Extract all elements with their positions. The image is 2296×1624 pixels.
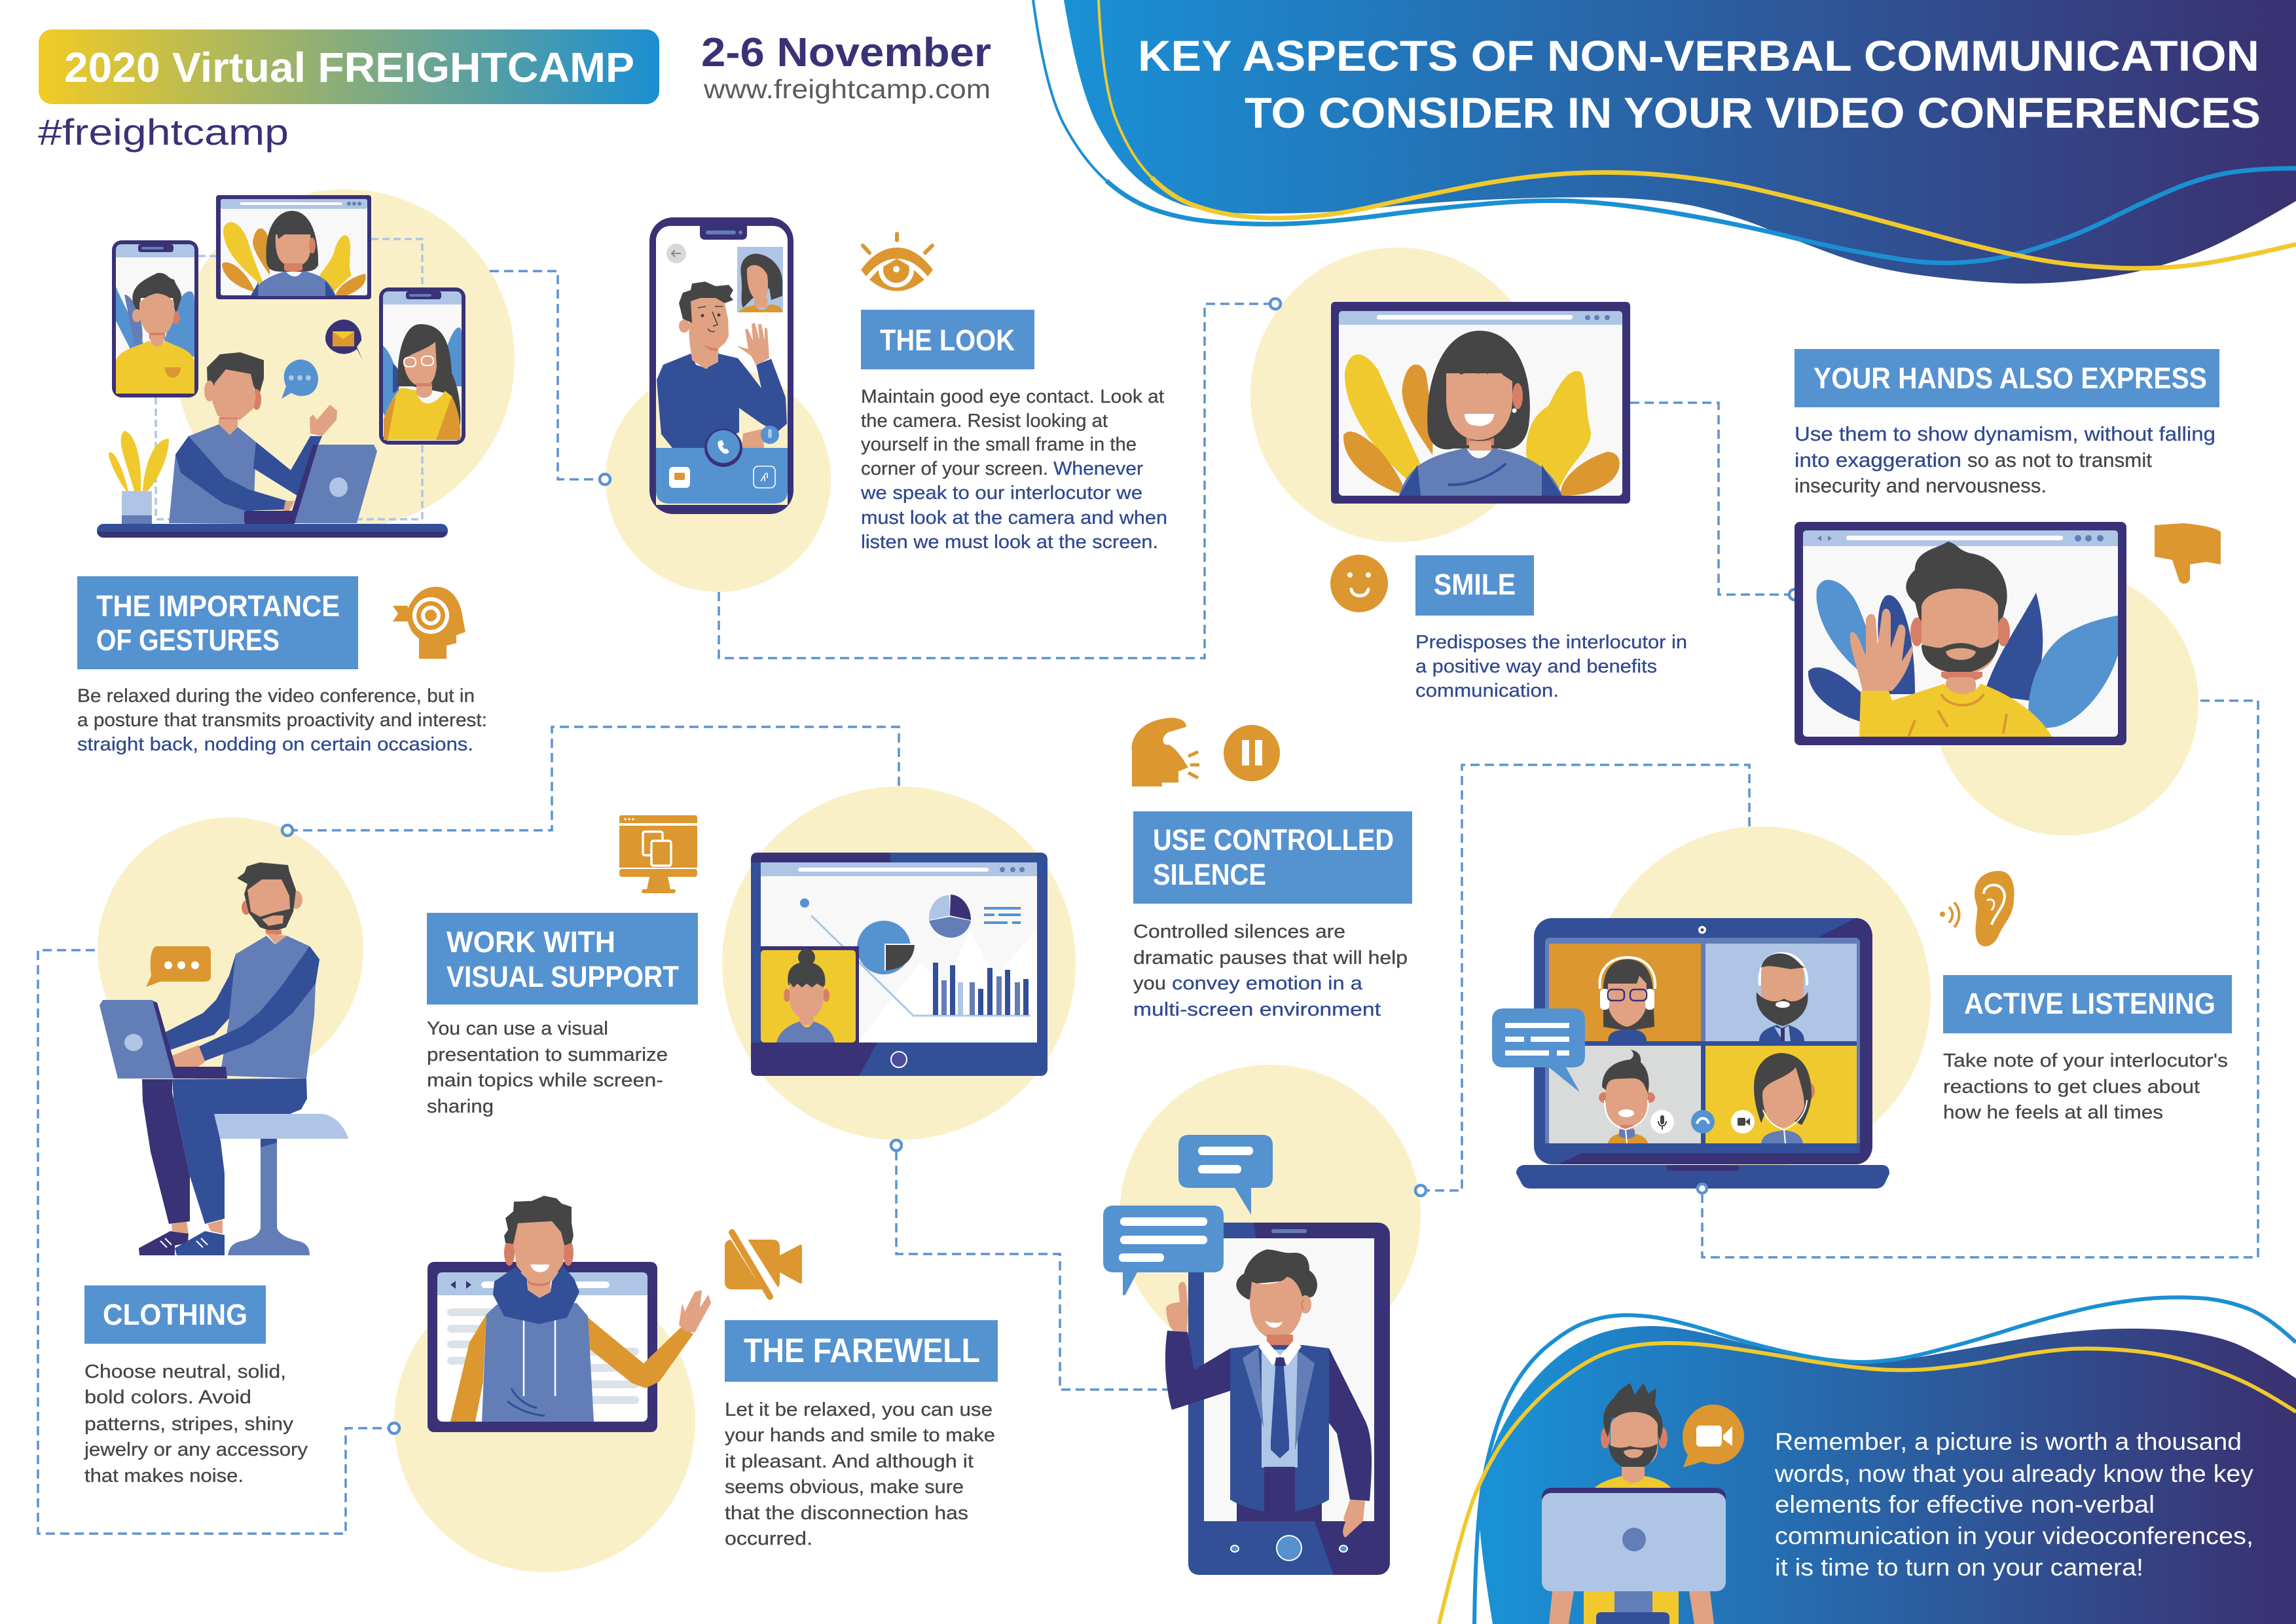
- icon: ear with sound waves: [1940, 871, 2014, 946]
- chat bubble: [146, 946, 211, 987]
- icon: camera off: [722, 1231, 802, 1300]
- icon: thumbs down: [2155, 523, 2221, 583]
- event date and website: 2-6 November: [701, 30, 991, 75]
- heading: the importance of gestures: THE IMPORTANCE: [96, 589, 340, 623]
- participant: man with earphones: [1549, 1046, 1701, 1143]
- text: clothing: Choose neutral, solid,: [84, 1361, 286, 1382]
- heading: clothing: [84, 1285, 266, 1344]
- text: the look: corner of your screen.: [861, 458, 1048, 479]
- jacket, shirt, tie: [1230, 1341, 1329, 1511]
- heading: the look: [861, 310, 1034, 369]
- text: active listening: Take note of your interlocutor's: [1943, 1050, 2228, 1071]
- illustration: man on video call with three participants: [97, 195, 465, 538]
- heading: your hands also express: [1795, 349, 2219, 407]
- closing banner with message: [1439, 1297, 2296, 1624]
- call and control buttons: [669, 426, 779, 488]
- text: the farewell: that the disconnection has: [725, 1503, 968, 1524]
- text: the farewell: seems obvious, make sure: [725, 1477, 964, 1498]
- text: active listening: [1943, 1050, 2228, 1123]
- text: hands: Use them to show dynamism, without falling: [1795, 422, 2215, 445]
- participant: bearded man with headset: [1705, 944, 1857, 1041]
- text: gestures: a posture that transmits proactivity and interest:: [77, 710, 487, 731]
- text: the look: Whenever: [1053, 458, 1143, 479]
- text lines icon: [984, 907, 1021, 924]
- text: the farewell: your hands and smile to make: [725, 1425, 995, 1446]
- heading: the importance of gestures: [77, 576, 358, 669]
- text: clothing: bold colors. Avoid: [84, 1387, 251, 1408]
- text: clothing: jewelry or any accessory: [84, 1439, 308, 1460]
- body under laptop: [1549, 1591, 1714, 1624]
- small self-view frame: [737, 247, 783, 312]
- heading: active listening: [1943, 975, 2232, 1033]
- text: the look: listen we must look at the screen.: [861, 532, 1158, 553]
- text: the look: the camera. Resist looking at: [861, 411, 1108, 432]
- text: smile: Predisposes the interlocutor in: [1415, 632, 1687, 653]
- illustration: smiling woman on screen: [1331, 302, 1630, 504]
- heading: the farewell: [725, 1320, 998, 1382]
- text: the farewell: Let it be relaxed, you can use: [725, 1399, 993, 1420]
- text: the farewell: occurred.: [725, 1528, 812, 1549]
- heading: your hands also express: YOUR HANDS ALSO EXPRESS: [1813, 361, 2207, 395]
- dashed connectors linking the steps: [38, 271, 2258, 1534]
- stool: [214, 1114, 348, 1255]
- screen with woman: [216, 195, 371, 299]
- text: controlled silence: multi-screen environment: [1133, 999, 1381, 1020]
- woman video frame: [761, 946, 859, 1044]
- text: controlled silence: Controlled silences are: [1133, 921, 1345, 942]
- connector node on laptop base: [1698, 1184, 1707, 1193]
- heading: work with visual support: [427, 913, 698, 1005]
- illustration: man at laptop ready to turn on camera: [1542, 1383, 1744, 1624]
- text: controlled silence: you: [1133, 973, 1166, 994]
- text: active listening: how he feels at all times: [1943, 1102, 2163, 1123]
- heading: the look: THE LOOK: [880, 323, 1015, 357]
- heading: use controlled silence: [1133, 811, 1412, 904]
- text: the farewell: it pleasant. And although it: [725, 1451, 974, 1472]
- illustration: man waving goodbye on screen: [428, 1196, 711, 1432]
- arms and hands: [1165, 1282, 1372, 1538]
- text: smile: [1415, 632, 1687, 701]
- text: visual support: [427, 1018, 668, 1117]
- text: hands: so as not to transmit: [1967, 449, 2152, 471]
- bar chart: [933, 963, 1029, 1015]
- text: clothing: [84, 1361, 308, 1486]
- mail bubble icon: [325, 320, 363, 360]
- closing banner with message: words, now that you already know the key: [1774, 1460, 2254, 1487]
- laptop: [100, 1000, 227, 1079]
- man: [657, 282, 787, 448]
- text: the look: we speak to our interlocutor we: [860, 483, 1142, 504]
- text: controlled silence: [1133, 921, 1408, 1020]
- text: visual support: sharing: [427, 1096, 494, 1117]
- text: gestures: Be relaxed during the video conference, but in: [77, 686, 475, 707]
- closing banner with message: elements for effective non-verbal: [1775, 1491, 2155, 1518]
- event date and website: www.freightcamp.com: [703, 74, 991, 104]
- man at laptop: [169, 352, 377, 524]
- heading: use controlled silence: SILENCE: [1153, 858, 1266, 891]
- chat bubble: [1492, 1008, 1585, 1092]
- laptop base: [1516, 1165, 1889, 1189]
- icon: eye: [861, 232, 933, 291]
- text: the look: yourself in the small frame in the: [861, 434, 1137, 455]
- speech bubbles: [1103, 1135, 1273, 1295]
- text: smile: communication.: [1415, 680, 1559, 701]
- icon: target in head: [393, 587, 465, 659]
- heading: smile: [1415, 555, 1534, 616]
- desk: [97, 524, 448, 538]
- text: hands: into exaggeration: [1795, 449, 1961, 471]
- icon: presentation monitor: [619, 815, 697, 893]
- text: controlled silence: dramatic pauses that will help: [1133, 948, 1408, 969]
- text: clothing: that makes noise.: [84, 1466, 244, 1486]
- text: active listening: reactions to get clues about: [1943, 1077, 2200, 1098]
- laptop: [1542, 1488, 1726, 1591]
- hashtag: #freightcamp: [38, 111, 289, 153]
- legs and shoes: [139, 1079, 307, 1255]
- title banner: TO CONSIDER IN YOUR VIDEO CONFERENCES: [1245, 88, 2261, 137]
- heading: work with visual support: VISUAL SUPPORT: [446, 960, 679, 993]
- text: hands: insecurity and nervousness.: [1795, 474, 2047, 497]
- torso and arms: [166, 936, 319, 1079]
- chat bubble icon: [282, 360, 318, 399]
- text: controlled silence: convey emotion in a: [1172, 973, 1363, 994]
- participant: woman with headset: [1549, 944, 1701, 1041]
- video camera bubble: [1683, 1405, 1744, 1467]
- event date and website: [701, 30, 991, 104]
- heading: the importance of gestures: OF GESTURES: [96, 623, 280, 657]
- icon: smile face: [1330, 555, 1388, 612]
- call controls: [1650, 1110, 1755, 1134]
- header pill: event name: [39, 29, 659, 104]
- closing banner with message: communication in your videoconferences,: [1775, 1522, 2253, 1549]
- left phone with man: [112, 240, 198, 397]
- illustration: laptop with four video participants: [1492, 918, 1889, 1189]
- illustration: bearded man waving on screen: [1795, 522, 2126, 745]
- text: visual support: main topics while screen-: [427, 1070, 663, 1091]
- text: the look: must look at the camera and when: [861, 507, 1167, 528]
- illustration: tablet with charts: [751, 853, 1048, 1076]
- text: the look: [860, 386, 1167, 553]
- title banner: KEY ASPECTS OF NON-VERBAL COMMUNICATION: [1138, 31, 2259, 80]
- text: gestures: straight back, nodding on certain occasions.: [77, 734, 473, 755]
- right phone with woman: [379, 287, 465, 445]
- title banner: [1033, 0, 2296, 284]
- participant: woman with earphones: [1705, 1046, 1857, 1143]
- text: visual support: You can use a visual: [427, 1018, 608, 1039]
- text: the farewell: [725, 1399, 995, 1549]
- text: visual support: presentation to summarize: [427, 1044, 668, 1065]
- heading: active listening: ACTIVE LISTENING: [1964, 987, 2215, 1020]
- icons: speaking head and pause: [1132, 718, 1280, 786]
- head: [237, 862, 302, 944]
- header pill: event name: 2020 Virtual FREIGHTCAMP: [64, 44, 634, 91]
- heading: use controlled silence: USE CONTROLLED: [1153, 823, 1394, 857]
- decorative cream circles: [98, 189, 2198, 1572]
- heading: the farewell: THE FAREWELL: [744, 1332, 980, 1370]
- closing banner with message: Remember, a picture is worth a thousand: [1775, 1428, 2242, 1455]
- text: the look: Maintain good eye contact. Look at: [861, 386, 1164, 407]
- pants: [1237, 1502, 1322, 1521]
- text: hands: [1795, 422, 2215, 497]
- text: smile: a positive way and benefits: [1415, 656, 1657, 677]
- text: gestures: [77, 686, 487, 755]
- illustration: man in suit on phone: [1103, 1135, 1390, 1575]
- pie chart: [857, 895, 971, 974]
- text: clothing: patterns, stripes, shiny: [84, 1414, 294, 1435]
- illustration: phone with man looking at camera: [649, 217, 793, 514]
- heading: clothing: CLOTHING: [103, 1298, 247, 1331]
- plant: [109, 431, 169, 524]
- heading: smile: SMILE: [1434, 568, 1516, 601]
- heading: work with visual support: WORK WITH: [446, 925, 615, 959]
- closing banner with message: it is time to turn on your camera!: [1775, 1554, 2143, 1581]
- illustration: seated man with laptop: [100, 862, 348, 1255]
- head: [1236, 1249, 1317, 1356]
